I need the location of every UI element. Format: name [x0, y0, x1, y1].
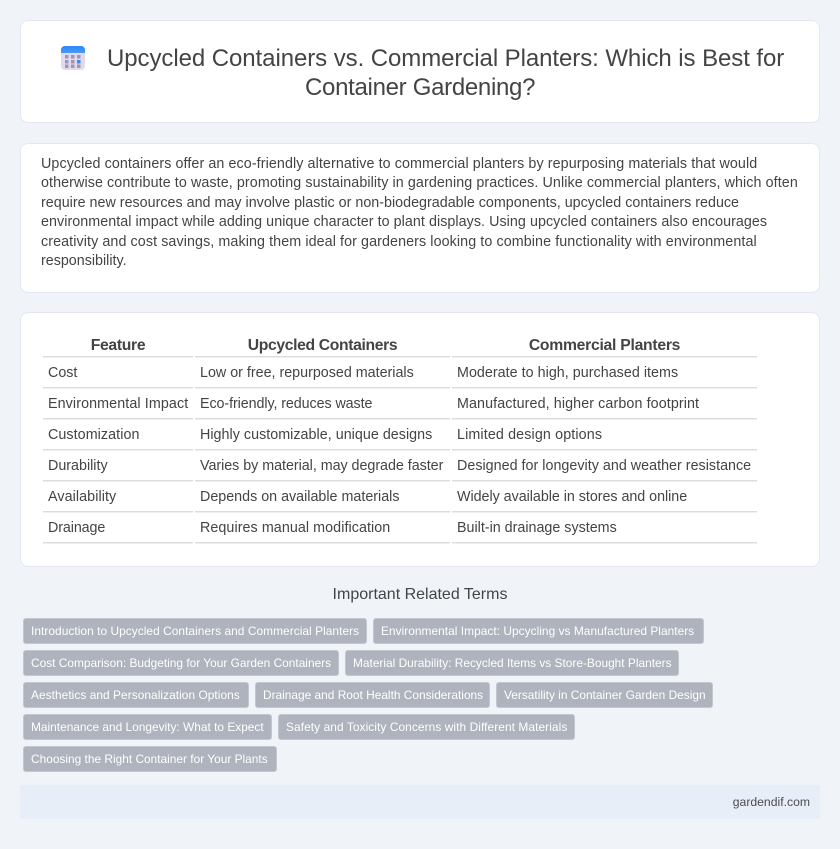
panel: intro text: require new resources and may involve plastic or non-biodegradable components, upcycled containers reduce	[41, 195, 739, 211]
heading: related terms: Important Related Terms	[333, 586, 507, 603]
panel: intro text: otherwise contribute to waste, promoting sustainability in gardening practices. Unlike commercial planters, which often	[41, 175, 798, 191]
panel: comparison table: Eco-friendly, reduces waste	[200, 396, 372, 412]
tags: related terms: Maintenance and Longevity: What to Expect	[31, 720, 264, 734]
row: environmental impact: Environmental Impact	[48, 396, 188, 412]
icon: calendar	[61, 46, 85, 70]
footer	[20, 785, 820, 819]
panel: title header: Container Gardening?	[305, 74, 535, 101]
tags: related terms: Drainage and Root Health Considerations	[263, 688, 483, 702]
panel: comparison table	[20, 312, 820, 567]
tags: related terms: Choosing the Right Container for Your Plants	[31, 752, 268, 766]
row: customization: Customization	[48, 427, 140, 443]
tags: related terms: Cost Comparison: Budgeting for Your Garden Containers	[31, 656, 331, 670]
panel: comparison table: Varies by material, may degrade faster	[200, 458, 443, 474]
panel: intro text: Upcycled containers offer an eco-friendly alternative to commercial planters by repurposing materials that would	[41, 156, 757, 172]
tags: related terms: Introduction to Upcycled Containers and Commercial Planters	[31, 624, 359, 638]
table header: Feature	[91, 337, 145, 354]
row: drainage: Drainage	[48, 520, 105, 536]
tags: related terms	[23, 618, 713, 772]
panel: intro text: environmental impact while adding unique character to plant displays. Using upcycled containers also encourages	[41, 214, 767, 230]
row: availability: Availability	[48, 489, 116, 505]
tags: related terms: Material Durability: Recycled Items vs Store-Bought Planters	[353, 656, 672, 670]
panel: comparison table: Upcycled Containers	[248, 337, 397, 354]
panel: comparison table: Widely available in stores and online	[457, 489, 687, 505]
title: Upcycled Containers vs. Commercial Planters: Which is Best for	[107, 45, 784, 72]
panel: comparison table: Built-in drainage systems	[457, 520, 617, 536]
panel: comparison table: Low or free, repurposed materials	[200, 365, 414, 381]
panel: comparison table: Depends on available materials	[200, 489, 399, 505]
panel: comparison table: Manufactured, higher carbon footprint	[457, 396, 699, 412]
panel: intro text	[20, 143, 820, 293]
panel: intro text: creativity and cost savings, making them ideal for gardeners looking to combine functionality with environmental	[41, 234, 757, 250]
row: cost: Cost	[48, 365, 77, 381]
row: durability: Durability	[48, 458, 108, 474]
panel: comparison table: Highly customizable, unique designs	[200, 427, 432, 443]
panel: comparison table: Moderate to high, purchased items	[457, 365, 678, 381]
tags: related terms: Safety and Toxicity Concerns with Different Materials	[286, 720, 567, 734]
panel: comparison table: Commercial Planters	[529, 337, 680, 354]
panel: comparison table: Limited design options	[457, 427, 602, 443]
panel: comparison table: Requires manual modification	[200, 520, 390, 536]
footer credit: gardendif.com	[733, 795, 810, 809]
panel: comparison table: Designed for longevity and weather resistance	[457, 458, 751, 474]
panel: intro text: responsibility.	[41, 253, 127, 269]
tags: related terms: Versatility in Container Garden Design	[504, 688, 706, 702]
tags: related terms: Aesthetics and Personalization Options	[31, 688, 240, 702]
tags: related terms: Environmental Impact: Upcycling vs Manufactured Planters	[381, 624, 694, 638]
panel: title header	[20, 20, 820, 123]
